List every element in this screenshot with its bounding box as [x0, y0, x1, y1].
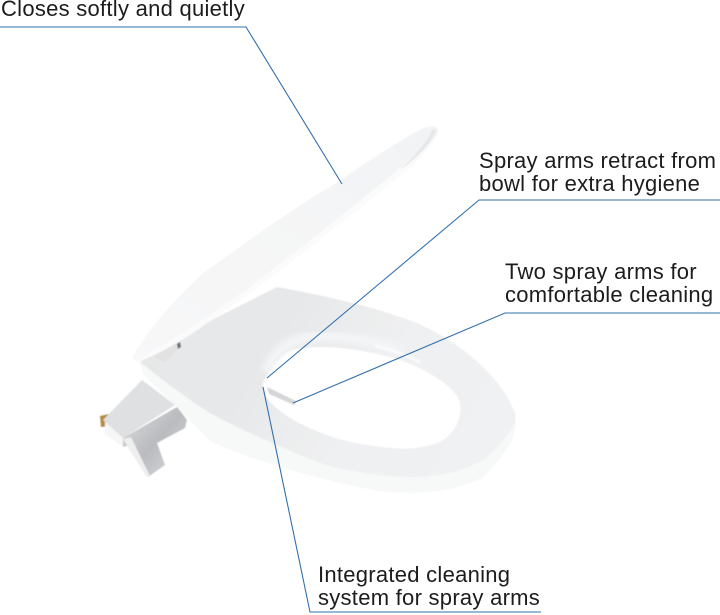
label: spray arms retract: bowl for extra hygiene — [479, 171, 700, 196]
callout line: spray arms retract — [267, 200, 720, 378]
label: integrated cleaning — [318, 562, 540, 610]
seat inner highlight — [375, 346, 420, 362]
label: integrated cleaning: system for spray arms — [318, 585, 540, 610]
label: spray arms retract: Spray arms retract from — [479, 148, 716, 173]
seat front edge — [140, 362, 516, 493]
hinge gap — [153, 341, 181, 362]
label: two spray arms — [505, 259, 713, 307]
callout line: integrated cleaning — [263, 387, 541, 612]
label: integrated cleaning: Integrated cleaning — [318, 562, 510, 587]
icon: brass water inlet — [100, 414, 110, 427]
seat ring — [140, 287, 516, 493]
seat inner highlight — [266, 336, 400, 372]
bracket: chrome bidet control — [103, 380, 187, 477]
illustration: bidet toilet seat — [100, 126, 516, 493]
callout line: two spray arms — [293, 313, 720, 403]
label: two spray arms: comfortable cleaning — [505, 282, 713, 307]
spray arm — [267, 387, 296, 405]
label: two spray arms: Two spray arms for — [505, 259, 697, 284]
callout line: closes softly — [0, 27, 342, 184]
label: spray arms retract — [479, 148, 716, 196]
lid — [132, 126, 438, 362]
